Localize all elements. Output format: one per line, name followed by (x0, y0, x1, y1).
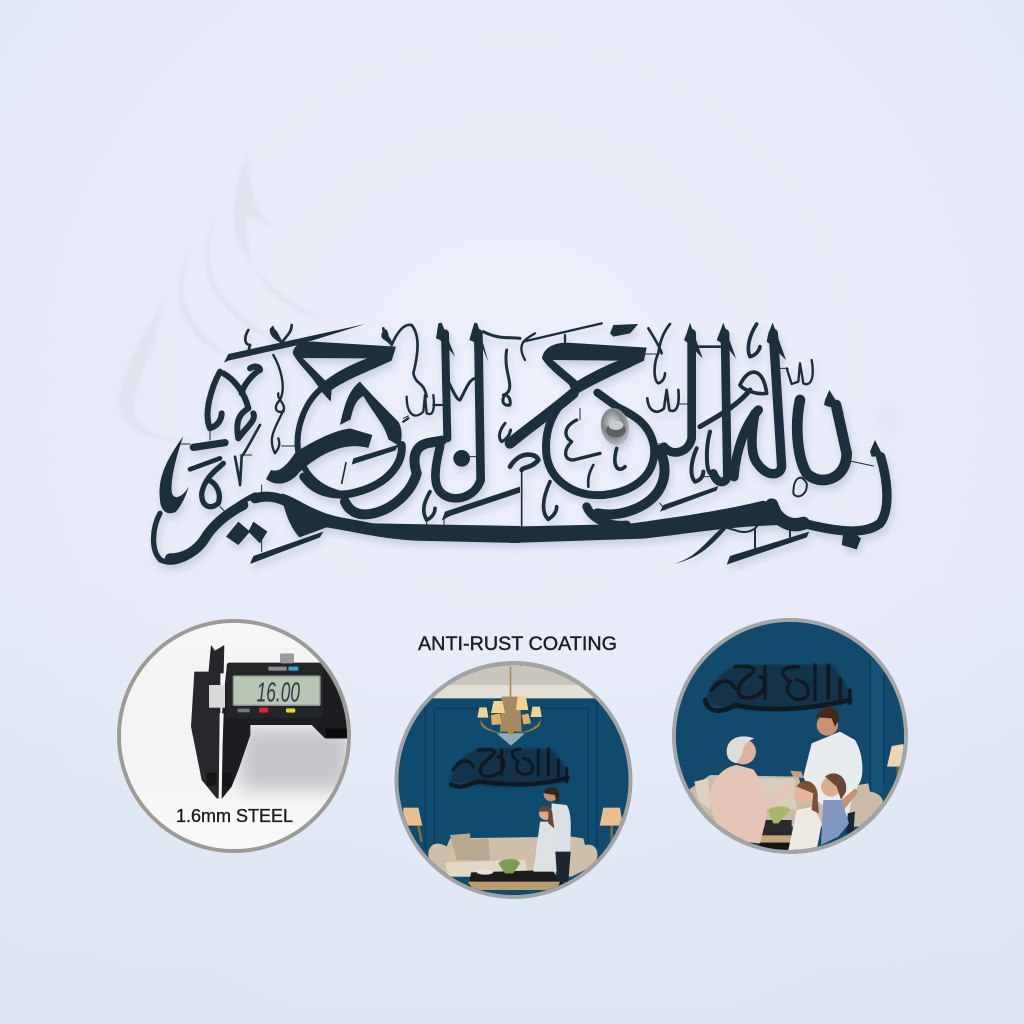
left half of calligraphy (154, 323, 520, 564)
grandmother (708, 736, 797, 843)
right half of calligraphy (510, 323, 887, 565)
photo: living room with father and daughter (395, 662, 632, 898)
watermark: faint flame logo (118, 153, 904, 442)
mini calligraphy on wall (704, 665, 851, 711)
sofa (688, 775, 883, 827)
table lamps (403, 808, 623, 826)
chandelier (477, 667, 542, 746)
heading: anti-rust coating: ANTI-RUST COATING (418, 633, 617, 655)
metal droplet (597, 405, 633, 448)
wall art: Bismillah calligraphy (154, 323, 887, 565)
coffee table (468, 870, 565, 888)
mini calligraphy on wall (450, 748, 569, 787)
photo: caliper measuring steel (115, 618, 355, 854)
table with flowers (762, 820, 792, 836)
photo: family under the wall art (672, 617, 908, 853)
lamp (887, 744, 905, 767)
daughter (533, 806, 557, 872)
two children (788, 773, 849, 850)
father (544, 787, 571, 882)
sofa (428, 837, 597, 877)
label: 1.6mm steel: 1.6mm STEEL (176, 806, 293, 826)
caliper readout: 16.00 (257, 676, 300, 707)
caliper (191, 645, 348, 799)
father (790, 707, 862, 833)
